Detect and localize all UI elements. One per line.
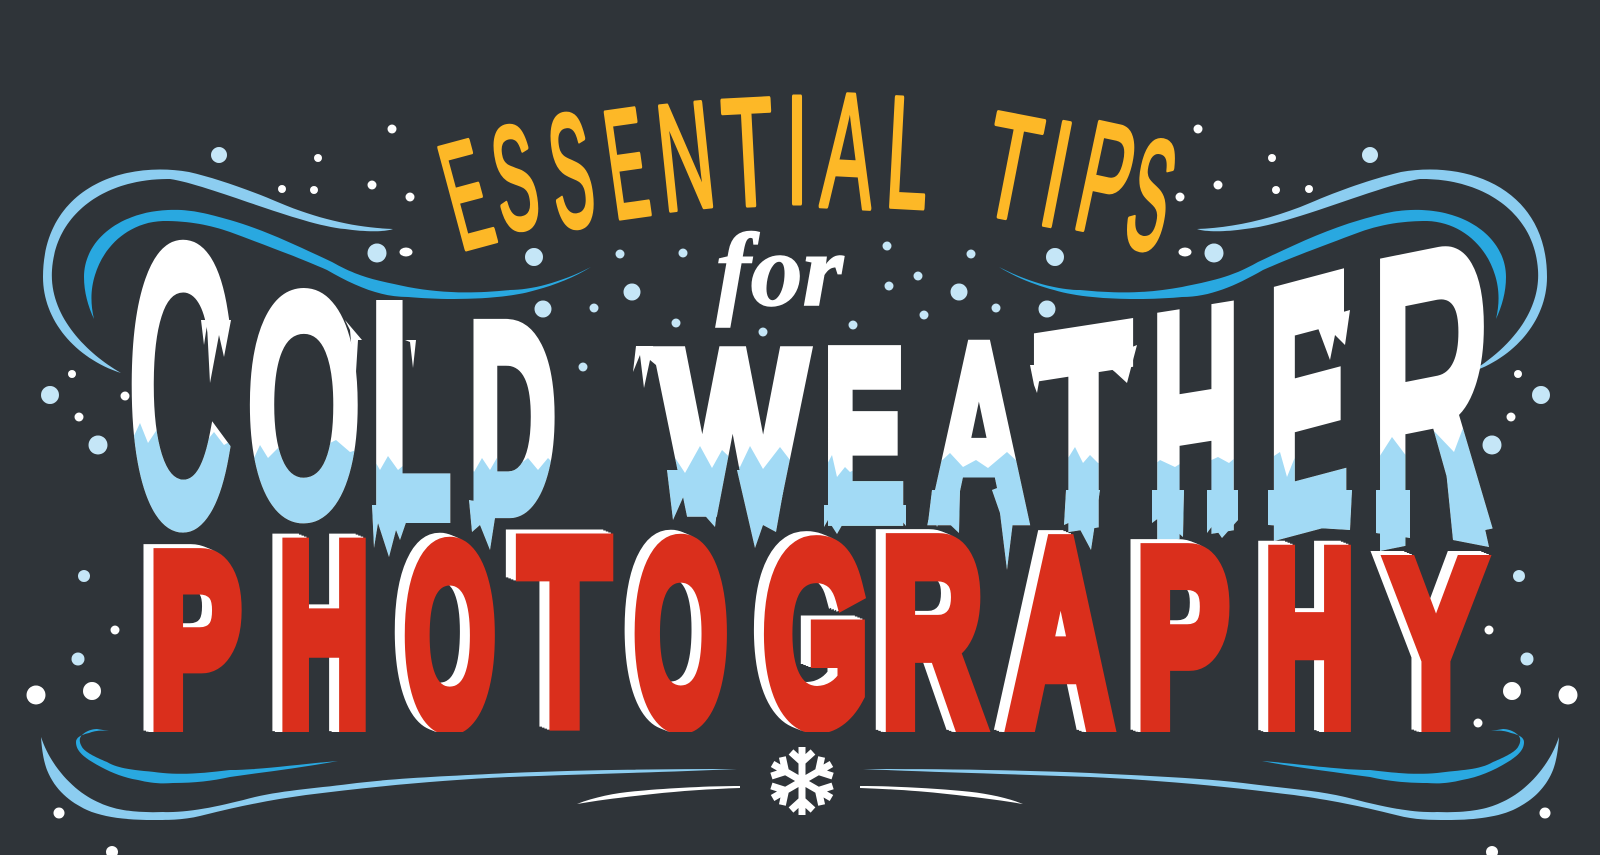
title: Photography: R	[883, 494, 982, 772]
title: Cold Weather: T	[1039, 278, 1128, 576]
title: Essential Tips: S	[482, 93, 548, 262]
title: Cold Weather: W	[663, 315, 802, 549]
swoosh: top left	[43, 169, 591, 373]
title: Essential Tips: T	[971, 82, 1053, 253]
swoosh: bottom right blue	[1262, 729, 1524, 783]
swoosh: bottom left long light	[41, 737, 737, 820]
ice colour band on the lower letters	[125, 420, 1500, 600]
title: Photography: O	[407, 505, 493, 769]
title: Photography: P	[1138, 507, 1228, 769]
title: Photography: Y	[1394, 523, 1478, 765]
title: Photography: O	[636, 499, 725, 768]
title: Cold Weather: L	[372, 253, 448, 570]
title: Photography: H	[280, 500, 368, 772]
swoosh: top right outer	[1197, 169, 1547, 373]
icicles on the letters	[201, 280, 1489, 570]
icon: snowflake	[767, 747, 837, 815]
title: Essential Tips	[426, 58, 1188, 286]
title: Essential Tips: E	[596, 76, 658, 251]
title: Cold Weather: D	[471, 281, 554, 558]
swoosh: top right	[999, 169, 1547, 373]
swoosh: top right inner	[999, 210, 1506, 319]
swoosh: top left inner	[84, 210, 591, 319]
title: Cold Weather: E	[826, 311, 901, 560]
title: Essential Tips: N	[650, 70, 721, 244]
title: Photography: P	[151, 514, 240, 769]
snow dots: light blue	[41, 147, 1550, 666]
title: Photography: T	[521, 496, 608, 769]
title: for: for	[716, 213, 845, 328]
title: Cold Weather: O	[249, 238, 359, 573]
title: Photography: A	[1016, 497, 1105, 772]
title: Essential Tips: S	[1114, 107, 1188, 286]
title: Photography: G	[766, 500, 866, 768]
swoosh: bottom left blue	[76, 729, 338, 783]
title: Essential Tips: E	[426, 109, 508, 282]
swoosh: bottom right long light	[863, 737, 1559, 820]
swoosh: bottom right white	[860, 786, 1023, 804]
title: Cold Weather: A	[936, 301, 1022, 565]
title: Cold Weather	[125, 163, 1500, 624]
title: Photography: H	[1266, 511, 1353, 769]
title: Essential Tips: A	[818, 58, 878, 243]
swoosh: bottom left white	[577, 786, 740, 804]
title: Photography	[151, 494, 1478, 772]
title: Cold Weather: E	[1270, 212, 1346, 598]
title: Essential Tips: I	[1030, 89, 1084, 259]
swoosh: bottom right	[860, 729, 1559, 820]
title: Essential Tips: L	[882, 64, 933, 243]
swoosh: top left outer	[43, 169, 393, 373]
title: Essential Tips: P	[1063, 89, 1149, 271]
title: Cold Weather: C	[129, 173, 230, 598]
title: Cold Weather: R	[1371, 163, 1491, 624]
title: Cold Weather: H	[1153, 252, 1238, 592]
title: Essential Tips: I	[786, 65, 808, 237]
title: Essential Tips: S	[540, 79, 603, 263]
swoosh: bottom left	[41, 729, 740, 820]
title: Essential Tips: T	[718, 66, 778, 240]
